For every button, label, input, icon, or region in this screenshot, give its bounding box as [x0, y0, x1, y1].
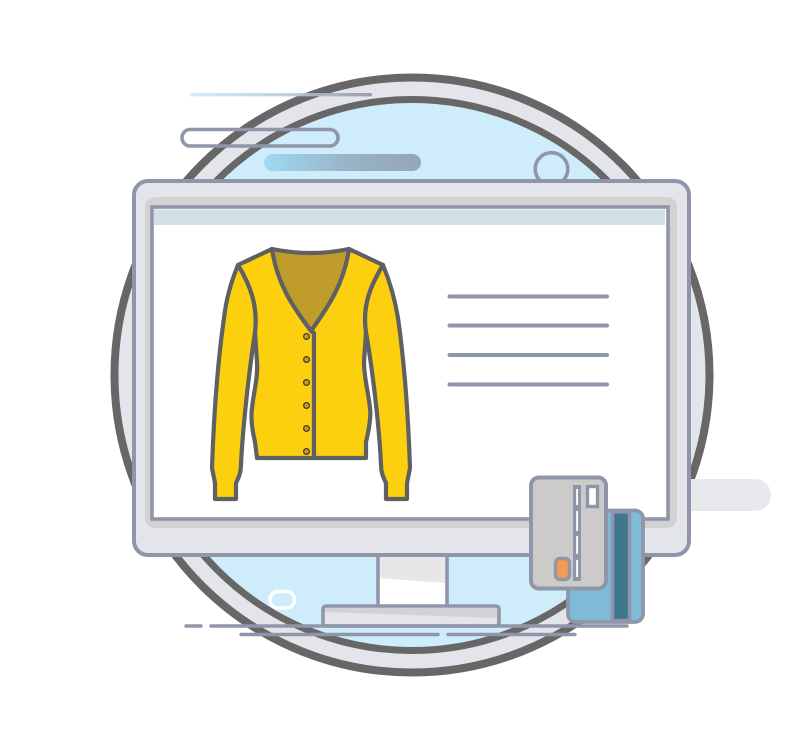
monitor stand	[378, 552, 447, 607]
right sleeve	[365, 265, 410, 499]
blue credit card (back)	[568, 510, 643, 622]
card number strip	[573, 485, 581, 581]
cardigan buttons	[304, 334, 309, 454]
cardigan body	[238, 249, 314, 458]
left sleeve	[212, 265, 256, 499]
background circle with double ring	[114, 78, 710, 672]
monitor base	[323, 606, 499, 626]
card small window	[588, 486, 598, 506]
top thin speed line	[190, 93, 372, 96]
ground lines	[186, 626, 627, 634]
yellow cardigan	[212, 249, 410, 499]
small outlined circle	[535, 153, 568, 185]
browser header bar	[154, 210, 665, 225]
small white ring	[270, 592, 294, 608]
neck curve	[272, 249, 349, 253]
gradient bar	[264, 154, 421, 171]
product description lines	[450, 296, 607, 384]
pale pill behind monitor	[640, 479, 771, 511]
browser screen	[152, 207, 668, 519]
grey credit card (front)	[531, 478, 606, 588]
magnetic stripe	[612, 512, 630, 620]
monitor body	[134, 181, 689, 555]
outlined pill	[182, 130, 338, 146]
cardigan neck lining	[272, 249, 349, 331]
card chip	[556, 558, 570, 580]
